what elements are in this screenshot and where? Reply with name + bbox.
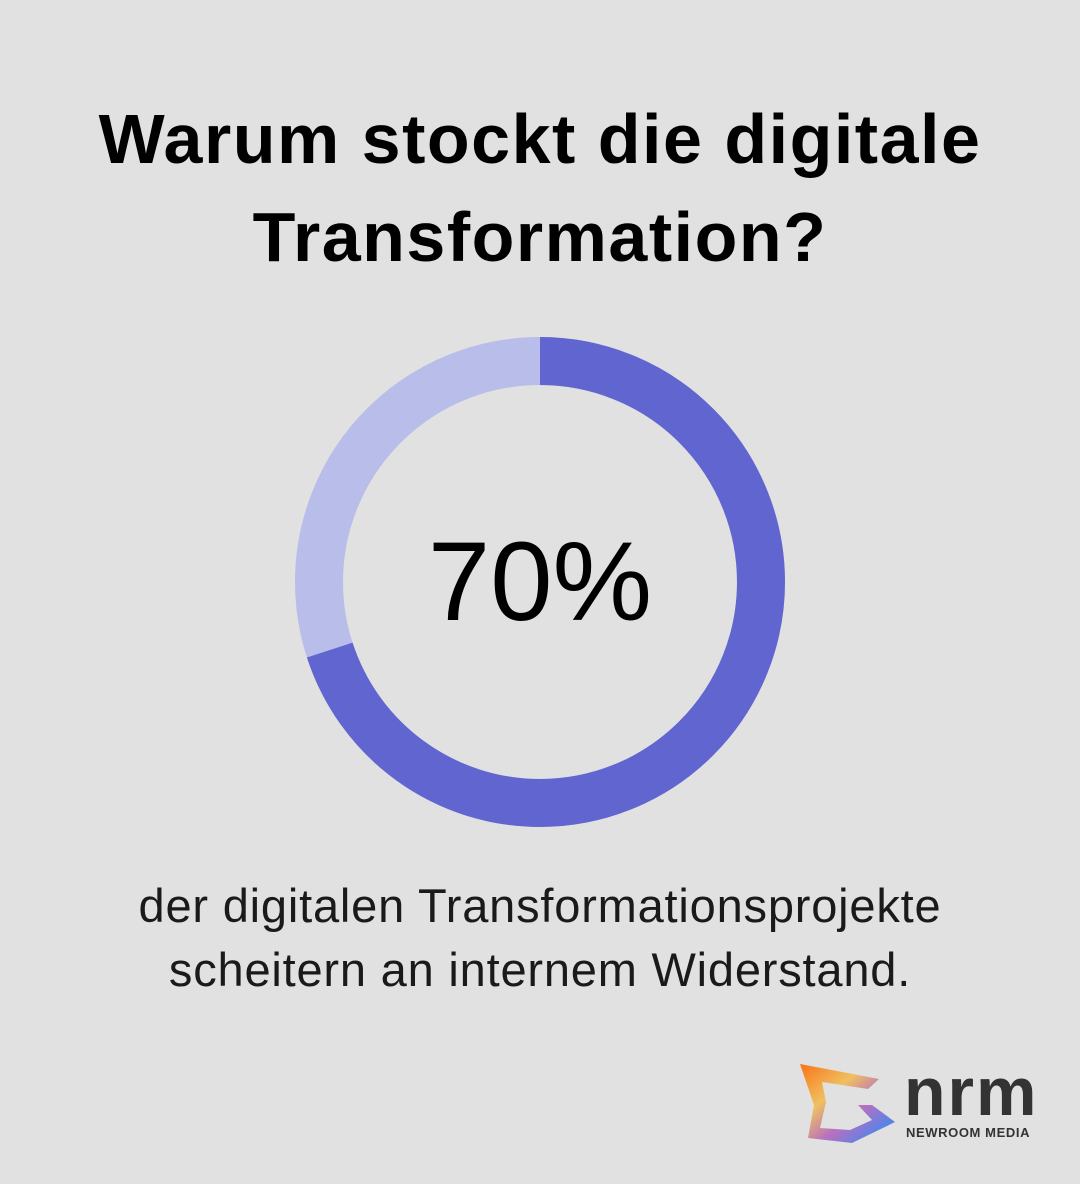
title: Transformation?: [253, 198, 827, 276]
logo text: nrm: [904, 1054, 1038, 1130]
description: scheitern an internem Widerstand.: [169, 943, 911, 996]
title: [98, 100, 981, 276]
percentage: 70%: [428, 519, 652, 644]
logo: NEWROOM MEDIA: [906, 1125, 1030, 1140]
icon: logo mark: [800, 1064, 895, 1143]
logo: [800, 1054, 1038, 1143]
title: Warum stockt die digitale: [99, 100, 981, 178]
description: der digitalen Transformationsprojekte: [139, 879, 941, 932]
description: [139, 879, 941, 996]
